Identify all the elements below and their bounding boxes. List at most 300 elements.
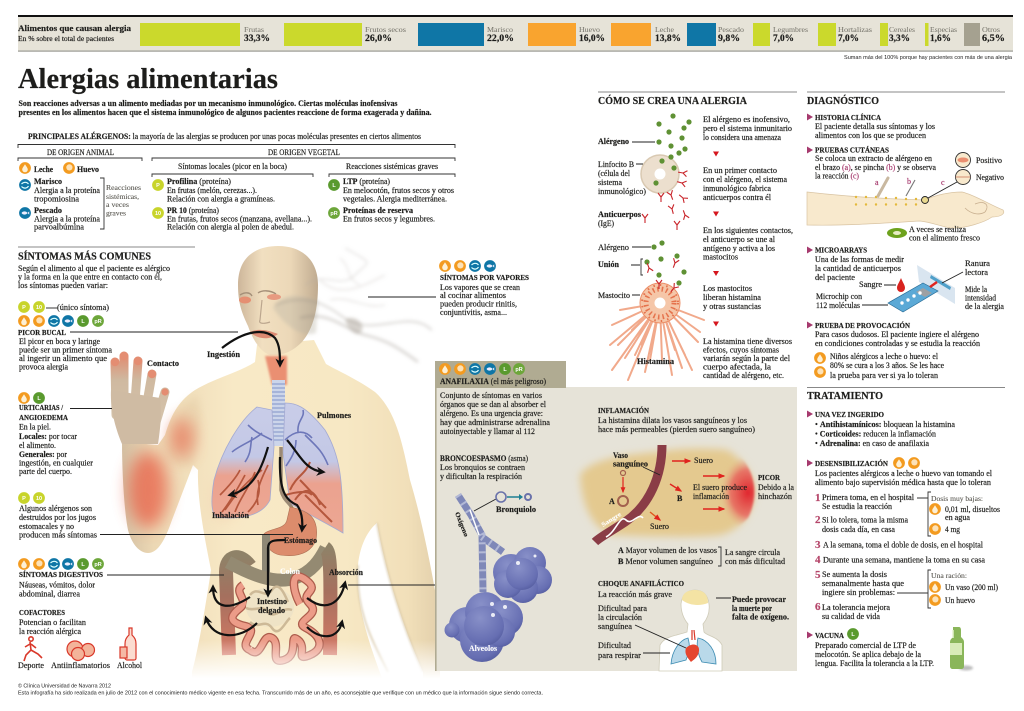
picor bucal: PICOR BUCAL (18, 329, 66, 337)
microarrays: Una de las formas de medir (815, 255, 904, 264)
mastocyte (640, 283, 680, 323)
top bar: food allergy chart: Marisco (487, 26, 514, 34)
top bar: food allergy chart: 16,0% (579, 34, 605, 44)
vegetal allergens: LTP (proteína) (343, 177, 390, 186)
intro text (18, 99, 432, 117)
desensibilizacion: Los pacientes alérgicos a leche o huevo van tomando el (815, 469, 993, 478)
step texts: El alérgeno es inofensivo, (703, 115, 790, 124)
panel: tratamiento (807, 388, 1005, 670)
vegetal allergens: En melocotón, frutos secos y otros (343, 186, 454, 195)
top bar: food allergy chart: Frutos secos (365, 26, 406, 34)
step texts: En los siguientes contactos, (703, 226, 793, 235)
cofactores: Deporte (18, 661, 44, 670)
desensibilizacion: 5 (815, 569, 821, 581)
panel: como se crea una alergia (598, 92, 797, 380)
urticarias: L (37, 396, 41, 402)
pruebas cutaneas (807, 144, 1004, 242)
left labels: inmunológico) (598, 187, 646, 196)
top bar: food allergy chart: En % sobre el total de pacientes (18, 35, 114, 43)
sintomas digestivos: L (81, 562, 85, 568)
animal allergens: Pescado (34, 206, 62, 215)
desensibilizacion: 0,01 ml, disueltos (945, 505, 1000, 514)
top bar: food allergy chart: 13,8% (655, 34, 681, 44)
pruebas cutaneas: con el alimento fresco (909, 234, 980, 242)
organ labels: Inhalación (212, 511, 250, 520)
choque anafilactico: la muerte por (732, 604, 772, 613)
una vez ingerido: • Corticoides: reducen la inflamación (815, 430, 936, 438)
desensibilizacion: La tolerancia mejora (822, 603, 890, 612)
desensibilizacion: Dosis muy bajas: (931, 494, 983, 503)
vegetal allergens: L (332, 183, 336, 189)
sintomas digestivos (18, 558, 224, 598)
inflamacion: hace más permeables (pierden suero sanguíneo) (598, 425, 755, 434)
una vez ingerido: • Adrenalina: en caso de anafilaxia (815, 439, 929, 448)
sintomas por vapores: pueden producir rinitis, (440, 300, 517, 308)
step texts: efectos, cuyos síntomas (703, 346, 779, 354)
animal allergens: sistémicas, (106, 192, 139, 201)
step texts: cuerpo afectada, la (703, 362, 771, 372)
inflamacion: Vaso (613, 451, 628, 460)
left labels: Linfocito B (598, 160, 634, 169)
urticarias: Generales: por (19, 450, 67, 459)
animal allergens: Alergia a la proteína (34, 214, 100, 224)
urticarias: ingestión, en cualquier (19, 458, 93, 468)
una vez ingerido: • Antihistamínicos: bloquean la histamina (815, 420, 955, 429)
step texts: el anticuerpo se une al (703, 235, 776, 244)
footer credits: Esta infografía ha sido realizada en julio de 2012 con el conocimiento médico vigente en esa fecha. Transcurrido más de un año, es aconsejable que verifique con un médico que la información sigue siendo correcta. (18, 690, 543, 696)
animal allergens: parvoalbúmina (34, 222, 84, 232)
historia clinica: HISTORIA CLÍNICA (815, 112, 882, 122)
animal allergens: Huevo (77, 165, 99, 174)
destruidos: producen más síntomas (19, 530, 97, 540)
choque anafilactico: CHOQUE ANAFILÁCTICO (598, 578, 684, 588)
panel: diagnostico (807, 92, 1005, 380)
intro text: Son reacciones adversas a un alimento mediadas por un mecanismo inmunológico. Ciertas moléculas inofensivas (18, 99, 398, 108)
top bar: food allergy chart: Leche (655, 26, 674, 34)
arm (807, 192, 1004, 228)
animal allergens: graves (106, 208, 126, 218)
inflamacion: Debido a la (758, 483, 794, 492)
small intestine (232, 577, 320, 661)
left labels: (célula del (598, 169, 631, 178)
left labels: Unión (598, 260, 620, 269)
choque anafilactico: Dificultad (598, 641, 631, 650)
desensibilizacion: 4 (815, 554, 821, 566)
vegetal allergens: P (156, 183, 160, 189)
vegetal allergens: 10 (155, 211, 161, 217)
desensibilizacion: en agua (945, 513, 970, 522)
inflamacion: Sangre (600, 511, 623, 529)
pruebas cutaneas: A veces se realiza (909, 225, 966, 234)
panel: como se crea una alergia: CÓMO SE CREA UNA ALERGIA (598, 95, 747, 107)
organ labels: Estómago (284, 536, 317, 545)
vegetal allergens: Proteínas de reserva (343, 206, 413, 215)
desensibilizacion: Se estudia la reacción (822, 502, 892, 511)
vegetal allergens: En frutas (melón, cerezas...). (167, 186, 257, 195)
sintomas por vapores (368, 260, 529, 317)
step texts: lo considera una amenaza (703, 133, 781, 142)
footer credits (18, 682, 543, 696)
step texts: anticuerpos contra él (703, 193, 772, 202)
sintomas digestivos: Náuseas, vómitos, dolor (19, 580, 95, 590)
panel: principales alergenos: DE ORIGEN VEGETAL (268, 148, 340, 157)
desensibilizacion: dosis cada día, en casa (822, 525, 895, 534)
cofactores: Antiinflamatorios (51, 661, 110, 670)
vegetal allergens: En frutos secos y legumbres. (343, 214, 435, 224)
top bar: food allergy chart: Cereales (889, 26, 915, 34)
panel: principales alergenos (18, 131, 455, 232)
urticarias: En la piel. (19, 422, 51, 432)
cofactores (18, 609, 143, 670)
desensibilizacion: semanalmente hasta que (822, 579, 904, 588)
top bar: food allergy chart: 7,0% (773, 34, 794, 44)
lungs (212, 403, 343, 533)
hand (111, 352, 169, 444)
choque anafilactico: La reacción más grave (598, 590, 672, 599)
choque anafilactico: falta de oxígeno. (732, 612, 789, 622)
pruebas cutaneas: la reacción (c) (815, 172, 859, 180)
panel: diagnostico: DIAGNÓSTICO (807, 95, 879, 107)
desensibilizacion: DESENSIBILIZACIÓN (815, 458, 889, 468)
choque anafilactico: para respirar (598, 651, 641, 660)
histamine rays (610, 303, 704, 380)
desensibilizacion: Un huevo (945, 596, 975, 605)
icons: picor bucal: 10 (36, 305, 42, 311)
panel: sintomas mas comunes (18, 247, 293, 670)
desensibilizacion: A la semana, toma el doble de dosis, en el hospital (823, 540, 984, 550)
organ labels: Pulmones (317, 411, 351, 420)
microchip (888, 265, 955, 312)
footer credits: © Clínica Universidad de Navarra 2012 (18, 682, 111, 690)
desensibilizacion: Una ración: (931, 571, 967, 580)
left labels: Alérgeno (598, 243, 629, 252)
panel: principales alergenos: DE ORIGEN ANIMAL (47, 148, 114, 157)
panel: tratamiento: TRATAMIENTO (807, 391, 883, 402)
panel: anafilaxia: órganos que se dan al absorber el (440, 400, 547, 409)
top bar: food allergy chart: Huevo (579, 26, 601, 34)
top bar: food allergy chart: Hortalizas (838, 26, 872, 34)
throat and trachea (265, 356, 287, 446)
step texts: inmunológico fabrica (703, 184, 771, 193)
bronchi and alveoli illustration: Alveolos (469, 644, 497, 653)
choque anafilactico: Puede provocar (732, 595, 786, 604)
desensibilizacion: su calidad de vida (822, 612, 880, 621)
cofactores: COFACTORES (19, 609, 65, 617)
blood vessel (595, 445, 662, 542)
urticarias: parte del cuerpo. (19, 467, 72, 476)
step texts: antígeno y activa a los (703, 244, 775, 253)
step texts: cantidad de alérgeno, etc. (703, 371, 784, 380)
panel: anafilaxia (435, 361, 797, 671)
pruebas cutaneas: c (941, 178, 945, 187)
destruidos: estomacales y no (19, 522, 74, 531)
pruebas cutaneas: b (907, 177, 911, 186)
prueba de provocacion: Para casos dudosos. El paciente ingiere el alérgeno (815, 330, 979, 339)
panel: sintomas mas comunes: y la forma en la que entre en contacto con él, (18, 272, 162, 282)
pruebas cutaneas: PRUEBAS CUTÁNEAS (815, 144, 889, 154)
organ labels (147, 350, 364, 615)
vacuna: melocotón. Se aplica debajo de la (815, 650, 921, 659)
destruidos: Algunos alérgenos son (19, 504, 92, 513)
desensibilizacion: Durante una semana, mantiene la toma en su casa (823, 556, 985, 564)
pruebas cutaneas: el brazo (a), se pincha (b) y se observa (815, 163, 936, 172)
organ labels: Intestino (257, 597, 287, 606)
sintomas por vapores: al cocinar alimentos (440, 291, 506, 300)
vegetal allergens: pR (330, 211, 338, 217)
pruebas cutaneas: Positivo (976, 156, 1002, 165)
pruebas cutaneas: Se coloca un extracto de alérgeno en (815, 154, 932, 163)
cofactores: Potencian o facilitan (19, 618, 86, 627)
step texts: y otras sustancias (703, 302, 761, 311)
microarrays: Ranura (965, 259, 990, 268)
prueba de provocacion: 80% se cura a los 3 años. Se les hace (830, 361, 944, 370)
inflamacion: La histamina dilata los vasos sanguíneos y los (598, 416, 747, 425)
desensibilizacion: 6 (815, 601, 821, 613)
prueba de provocacion: la prueba para ver si ya lo toleran (830, 371, 938, 380)
step texts: con el alérgeno, el sistema (703, 175, 787, 184)
animal allergens: Leche (34, 165, 53, 174)
animal allergens: Alergia a la proteína (34, 186, 100, 195)
top bar: food allergy chart: Otros (982, 26, 1000, 34)
lymphocyte (641, 155, 679, 193)
chart note: Suman más del 100% porque hay pacientes con más de una alergia (844, 55, 1012, 61)
panel: anafilaxia: pR (515, 367, 523, 373)
picor bucal: al ingerir un alimento que (19, 354, 107, 363)
human figure (659, 590, 722, 671)
top bar: food allergy chart: 3,3% (889, 34, 910, 44)
left labels: Histamina (637, 357, 674, 366)
vacuna: lengua. Facilita la tolerancia a la LTP. (815, 659, 934, 668)
icon: pills (67, 641, 94, 660)
inflamacion: A Mayor volumen de los vasos (618, 546, 717, 555)
picor bucal: provoca alergia (19, 362, 68, 372)
panel: anafilaxia: L (503, 367, 507, 373)
pruebas cutaneas: a (875, 178, 879, 187)
step texts: La histamina tiene diversos (703, 337, 792, 346)
inflamacion: Suero (694, 456, 713, 465)
desensibilizacion: Primera toma, en el hospital (822, 493, 915, 502)
animal allergens: Reacciones (106, 183, 141, 192)
icon: runner (24, 637, 42, 661)
urticarias: ANGIOEDEMA (19, 414, 69, 422)
inflamacion: B Menor volumen sanguíneo (618, 557, 713, 566)
black arrows (206, 332, 345, 636)
animal allergens (19, 162, 141, 232)
inflamacion: con más dificultad (725, 557, 785, 566)
desensibilizacion: Un vaso (200 ml) (945, 583, 998, 592)
urticarias: URTICARIAS / (19, 404, 64, 412)
top bar: food allergy chart: 33,3% (244, 34, 270, 44)
microarrays: Sangre (859, 280, 882, 289)
top bar: food allergy chart: 9,8% (718, 34, 740, 44)
inflamacion: inflamación (693, 492, 729, 501)
panel: anafilaxia: autoinyectable y llamar al 112 (440, 427, 535, 436)
organ labels: delgado (258, 606, 285, 615)
sintomas por vapores: conjuntivitis, asma... (440, 308, 507, 317)
urticarias (18, 392, 112, 476)
destruidos: 10 (36, 496, 42, 502)
vegetal allergens: En frutas, frutos secos (manzana, avellana...). (167, 214, 312, 224)
sintomas digestivos: abdominal, diarrea (19, 590, 80, 598)
cofactores: la reacción alérgica (19, 627, 81, 636)
allergen dots (644, 113, 692, 286)
tissue (580, 449, 755, 537)
microarrays (807, 246, 1004, 312)
left labels: sistema (598, 178, 622, 187)
title: Alergias alimentarias (18, 64, 278, 95)
prueba de provocacion: Niños alérgicos a leche o huevo: el (830, 352, 939, 361)
prueba de provocacion (807, 320, 980, 380)
vegetal allergens: Profilina (proteína) (167, 177, 231, 186)
icons: picor bucal: pR (94, 319, 102, 325)
icon: alcohol (120, 628, 136, 660)
historia clinica (807, 112, 935, 140)
desensibilizacion: 2 (815, 514, 821, 526)
top bar: food allergy chart: Especias (930, 26, 957, 34)
panel: anafilaxia: hay que administrarse adrenalina (440, 418, 550, 427)
picor bucal (18, 329, 238, 372)
step texts: mastocitos (703, 252, 738, 262)
icons: picor bucal: (único síntoma) (57, 303, 109, 312)
destruidos (18, 492, 293, 540)
inflamacion: sanguíneo (613, 460, 648, 468)
absorption line (348, 584, 436, 586)
vegetal allergens: vegetales. Alergia mediterránea. (343, 194, 447, 204)
digestive system (226, 447, 330, 661)
desensibilizacion: 3 (815, 539, 821, 551)
left labels: Anticuerpos (598, 210, 641, 219)
microarrays: intensidad (965, 294, 996, 302)
vegetal allergens: Relación con alergia al polen de abedul. (167, 222, 294, 232)
panel: anafilaxia: ANAFILAXIA (el más peligroso) (440, 377, 546, 386)
animal allergens: tropomiosina (34, 194, 79, 204)
inflamacion: PICOR (758, 474, 781, 482)
microarrays: MICROARRAYS (815, 246, 867, 254)
panel: anafilaxia: Los bronquios se contraen (440, 463, 525, 472)
choque anafilactico: sanguínea (598, 622, 632, 631)
top bar: food allergy chart (18, 15, 1013, 52)
top bar: food allergy chart: Legumbres (773, 26, 808, 34)
microarrays: lectora (965, 268, 988, 277)
panel: principales alergenos: Síntomas locales (picor en la boca) (178, 162, 287, 171)
pruebas cutaneas: Negativo (976, 173, 1004, 182)
historia clinica: alimentos con los que se producen (815, 131, 926, 140)
inflamacion: INFLAMACIÓN (598, 405, 650, 415)
vacuna: Preparado comercial de LTP de (815, 641, 916, 650)
bronchi and alveoli illustration (444, 492, 552, 662)
step texts (703, 115, 793, 380)
microarrays: 112 moléculas (816, 301, 860, 310)
picor bucal: El picor en boca y laringe (19, 337, 100, 346)
desensibilizacion: 1 (815, 492, 820, 504)
prueba de provocacion: PRUEBA DE PROVOCACIÓN (815, 320, 911, 330)
bottom fade (180, 640, 442, 695)
step texts: En un primer contacto (703, 166, 777, 175)
panel: anafilaxia: y dificultan la respiración (440, 472, 522, 481)
top bar: food allergy chart: 1,6% (930, 34, 951, 44)
step texts: pero el sistema inmunitario (703, 124, 792, 133)
inflamacion: hinchazón (758, 492, 792, 501)
body illustration (111, 246, 442, 695)
una vez ingerido: UNA VEZ INGERIDO (815, 411, 884, 419)
picor bucal: puede ser un primer síntoma (19, 346, 112, 354)
vacuna: L (851, 632, 855, 638)
panel: sintomas mas comunes: los síntomas pueden variar: (18, 281, 108, 290)
left labels (598, 137, 674, 366)
urticarias: el alimento. (19, 441, 56, 450)
animal allergens: Marisco (34, 177, 62, 186)
icons: picor bucal (18, 301, 109, 327)
intro text: presentes en los alimentos hacen que el sistema inmunológico de algunos pacientes reaccione de forma exagerada y dañina. (18, 108, 432, 117)
inflamacion: B (677, 494, 683, 503)
head and face (238, 246, 318, 355)
desensibilizacion: Si lo tolera, toma la misma (822, 516, 908, 524)
destruidos: P (22, 496, 26, 502)
top bar: food allergy chart: 7,0% (838, 34, 859, 44)
vegetal allergens: PR 10 (proteína) (167, 206, 219, 215)
top bar: food allergy chart: 6,5% (982, 34, 1005, 44)
bronchi and alveoli illustration: Bronquiolo (496, 505, 536, 514)
smoke (273, 248, 432, 362)
animal allergens: a veces (106, 200, 129, 209)
una vez ingerido (807, 410, 955, 448)
panel: sintomas mas comunes: Según el alimento al que el paciente es alérgico (18, 264, 170, 273)
sintomas digestivos: pR (94, 562, 102, 568)
organ labels: Absorción (329, 568, 364, 577)
step texts: variarán según la parte del (703, 354, 791, 363)
top bar: food allergy chart: 22,0% (487, 34, 514, 44)
step texts: liberan histamina (703, 293, 761, 302)
step texts: Los mastocitos (703, 284, 752, 293)
desensibilizacion: alimento bajo supervisión médica hasta que lo toleran (815, 478, 991, 487)
vacuna: VACUNA (815, 632, 845, 640)
icons: picor bucal: P (22, 305, 26, 311)
desensibilizacion (807, 457, 1000, 621)
inflamacion: El suero produce (693, 483, 747, 492)
top bar: food allergy chart: Frutas (244, 26, 264, 34)
desensibilizacion: 4 mg (945, 525, 960, 534)
vegetal allergens: Relación con alergia a gramíneas. (167, 194, 275, 204)
icon: vaccine bottle (950, 627, 973, 670)
choque anafilactico: la circulación (598, 613, 642, 622)
urticarias: Locales: por tocar (19, 432, 77, 441)
top bar: food allergy chart: Alimentos que causan alergia (18, 24, 131, 33)
bronchi and alveoli illustration: Oxígeno (453, 511, 469, 538)
organ labels: Ingestión (207, 350, 241, 359)
desensibilizacion: Se aumenta la dosis (822, 570, 887, 579)
panel: principales alergenos: Reacciones sistémicas graves (346, 162, 438, 171)
top bar: food allergy chart: 26,0% (365, 34, 392, 44)
inflamacion (580, 405, 794, 566)
organ labels: Colon (280, 567, 301, 576)
microarrays: de la alergia (965, 302, 1004, 311)
vacuna (807, 627, 973, 670)
sintomas digestivos: SÍNTOMAS DIGESTIVOS (19, 569, 103, 579)
panel: anafilaxia: alérgeno. Es una urgencia grave: (440, 409, 543, 418)
historia clinica: El paciente detalla sus síntomas y los (815, 122, 935, 131)
sintomas por vapores: SÍNTOMAS POR VAPORES (440, 272, 529, 282)
sintomas por vapores: Los vapores que se crean (440, 283, 520, 292)
alveoli clusters (444, 547, 552, 662)
vegetal allergens (152, 177, 454, 232)
test dots (855, 196, 917, 206)
destruidos: destruidos por los jugos (19, 513, 96, 522)
inflamacion: A (609, 497, 615, 506)
inflamacion: La sangre circula (725, 548, 780, 557)
desensibilizacion: ingiere sin problemas: (822, 588, 895, 597)
inflamacion: Suero (650, 522, 669, 531)
top bar: food allergy chart: Pescado (718, 26, 745, 34)
